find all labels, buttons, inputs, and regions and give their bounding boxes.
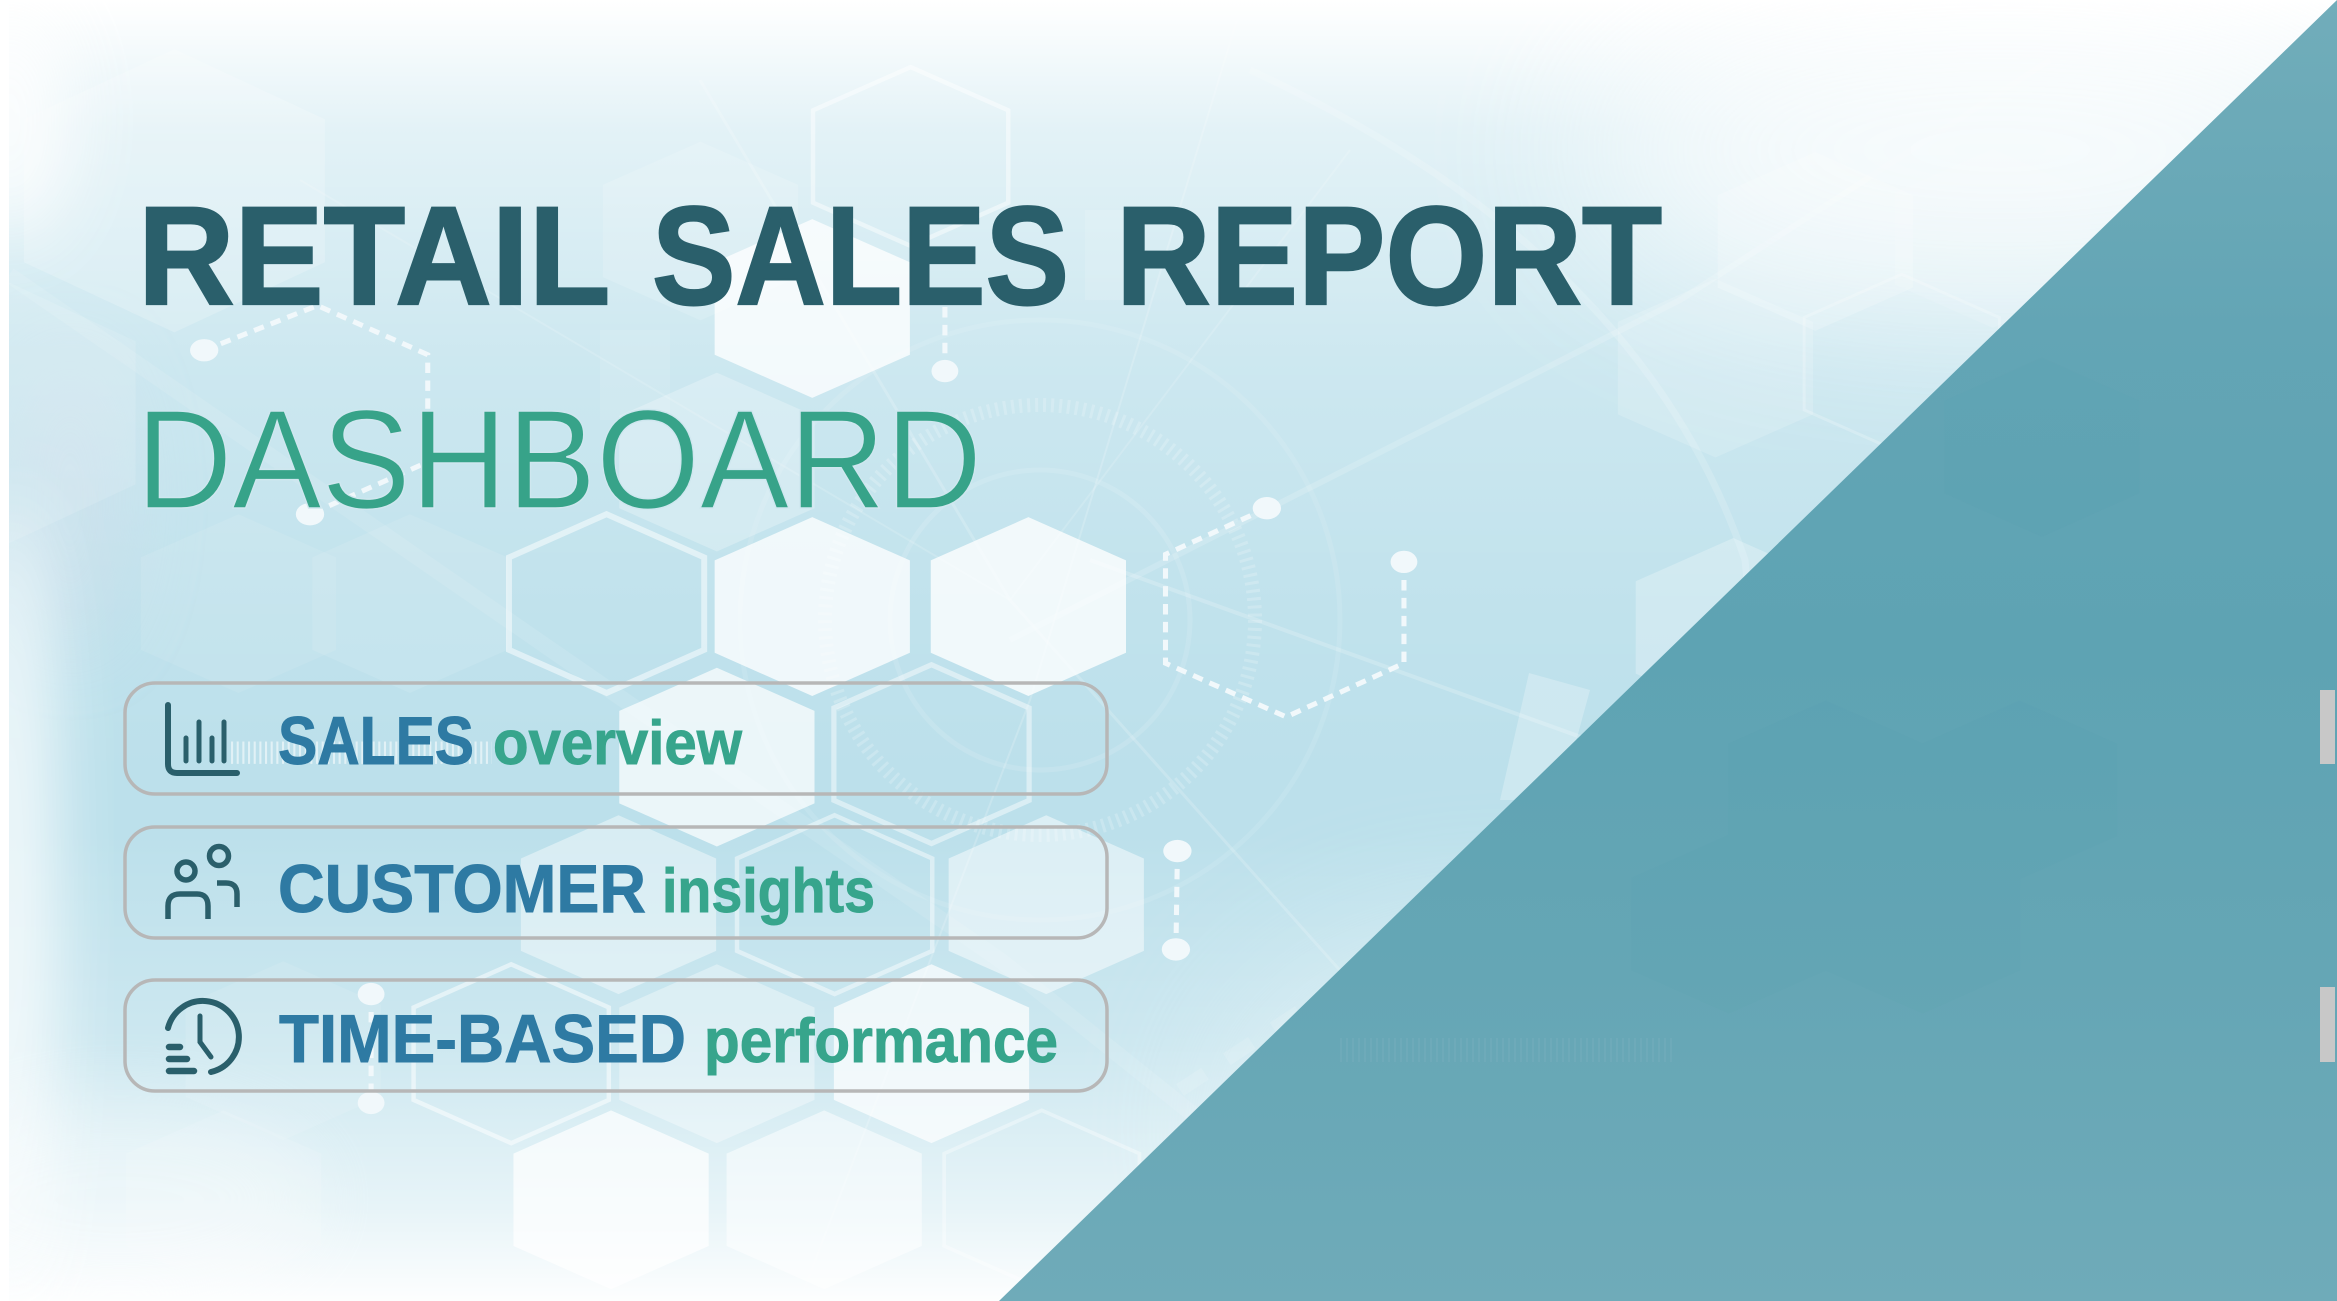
label: customer insights: insights: [662, 857, 875, 926]
title: SALES: [652, 177, 1069, 334]
menu item: sales overview: [125, 683, 1107, 794]
faint hexagons inside the triangle: [1631, 358, 2139, 1013]
icon: clock with speed lines: [168, 1001, 239, 1072]
icon: two people: [168, 846, 237, 919]
label: time-based performance: TIME-BASED: [279, 1001, 686, 1077]
slide edge marker: lower: [2320, 987, 2335, 1062]
slide edge marker: upper: [2320, 690, 2335, 764]
title: RETAIL: [138, 177, 608, 334]
background: dashed connector lines with dots: [190, 283, 1417, 1114]
icon: bar chart: [168, 705, 237, 773]
label: sales overview: overview: [493, 709, 743, 778]
subtitle: DASHBOARD: [136, 380, 982, 538]
label: customer insights: CUSTOMER: [278, 851, 646, 927]
label: sales overview: SALES: [278, 703, 474, 779]
menu item: time-based performance: [125, 980, 1107, 1091]
title: REPORT: [1116, 177, 1662, 334]
label: time-based performance: performance: [704, 1007, 1058, 1076]
teal triangle panel: [999, 0, 2337, 1301]
outlined hexagons: [414, 67, 1999, 1289]
menu item: customer insights: [125, 827, 1107, 938]
